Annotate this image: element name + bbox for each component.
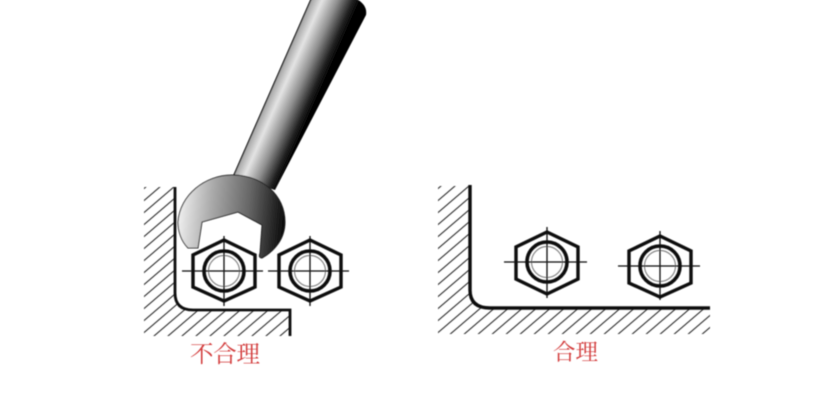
wrench head xyxy=(178,175,285,258)
wrench handle edge xyxy=(233,0,312,177)
nut: first nut xyxy=(504,227,587,298)
panel: reasonable layout xyxy=(438,185,710,365)
nut: right nut xyxy=(268,236,349,306)
hatched wall right xyxy=(438,186,710,334)
wrench handle xyxy=(233,0,366,190)
panel: unreasonable layout xyxy=(144,0,366,368)
label: reasonable: 合理 xyxy=(553,340,598,365)
hatched wall left xyxy=(144,187,290,336)
nut: left nut xyxy=(182,236,263,306)
icon: wrench xyxy=(178,0,366,258)
nut: second nut xyxy=(618,231,700,300)
label: unreasonable: 不合理 xyxy=(190,341,260,368)
wall outline right xyxy=(470,185,710,308)
wall outline left xyxy=(175,187,290,336)
